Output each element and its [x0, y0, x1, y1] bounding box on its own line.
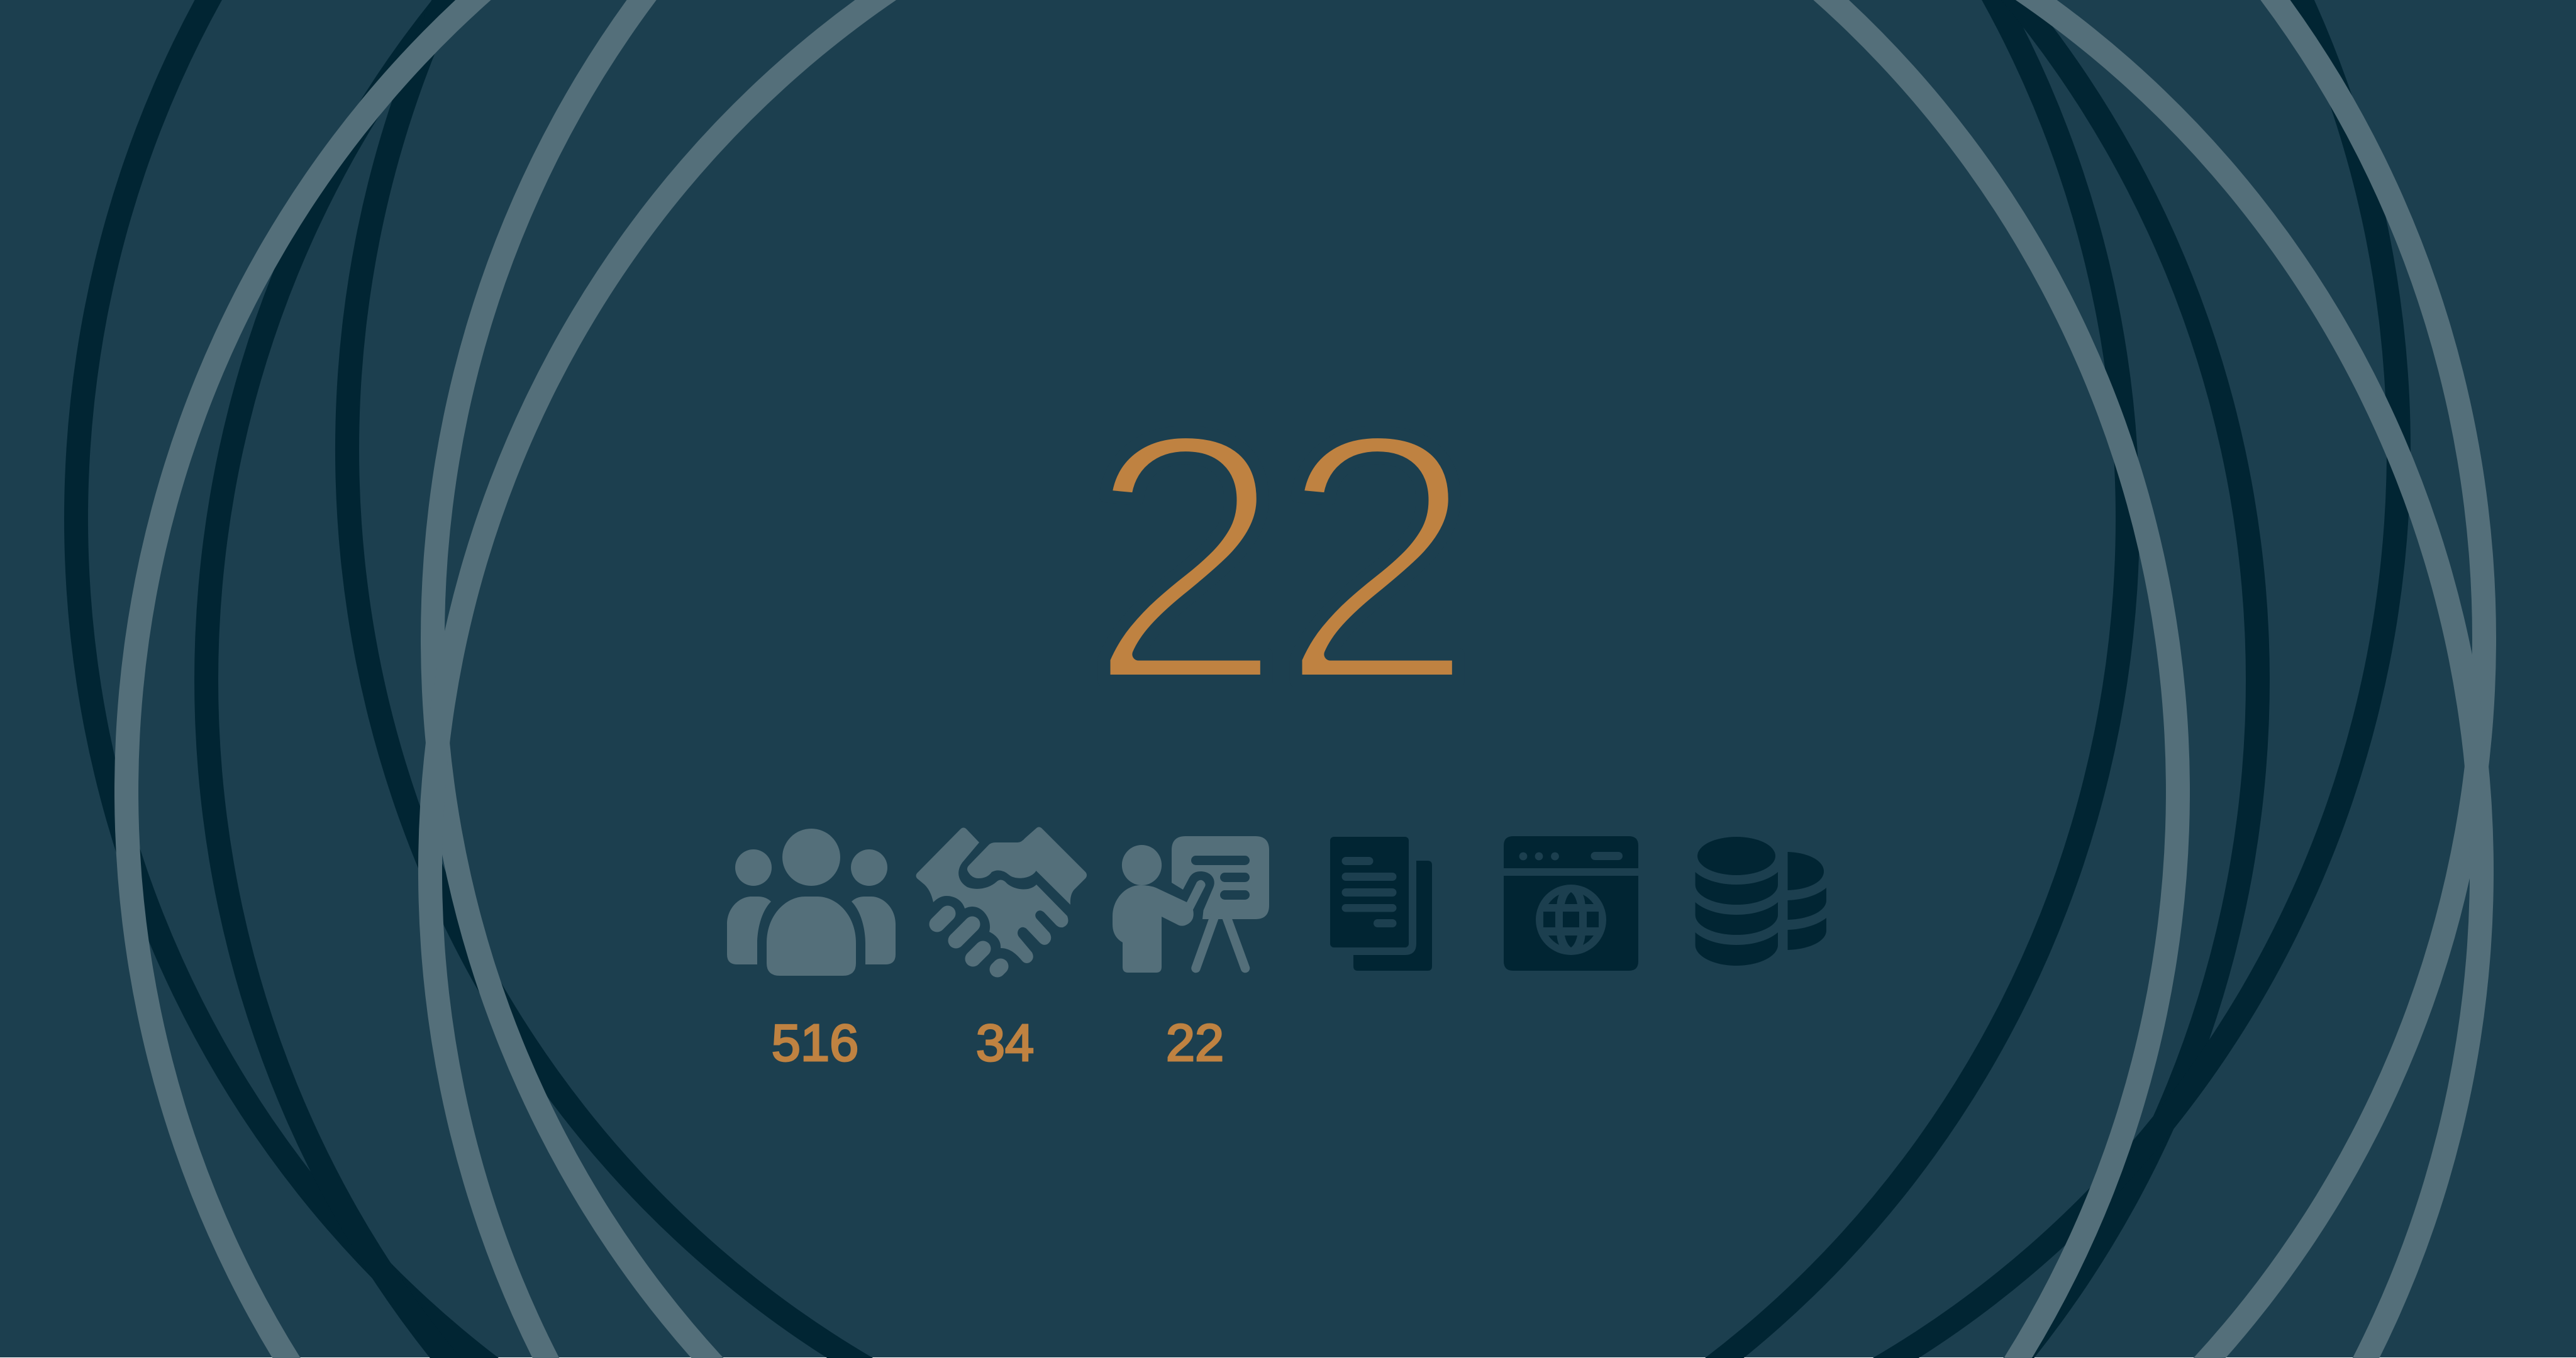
- icon: people: [727, 829, 896, 976]
- icon: database: [1696, 837, 1826, 966]
- icon: handshake: [916, 827, 1087, 969]
- icon: documents: [1330, 837, 1432, 971]
- icon: presenter: [1113, 836, 1269, 973]
- label: 34: 34: [976, 1013, 1034, 1072]
- icon: web window: [1504, 836, 1638, 971]
- label: 516: 516: [772, 1013, 858, 1072]
- main number: 22: [1086, 359, 1476, 757]
- label: 22: 22: [1166, 1013, 1224, 1072]
